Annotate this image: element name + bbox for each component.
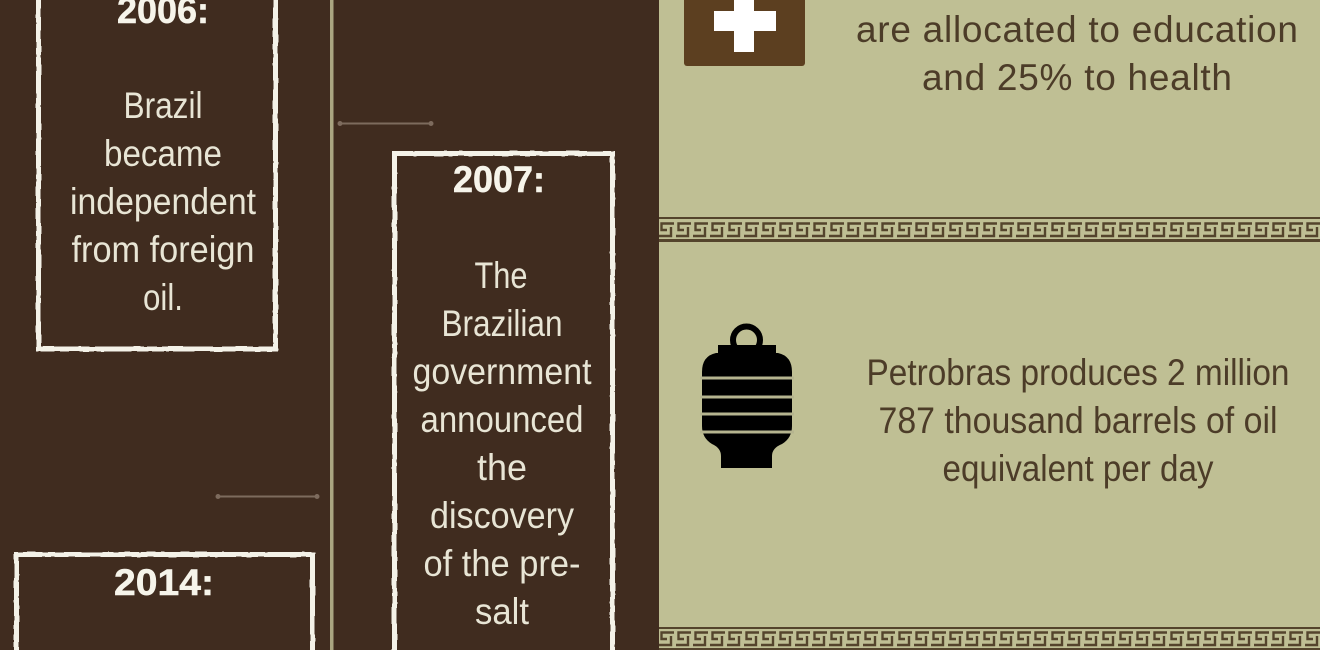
fact text: Petrobras production [866,352,1290,489]
fact text: education and health: are allocated to education [856,9,1298,50]
fact text: Petrobras production: equivalent per day [942,448,1214,489]
timeline card: 2006 [38,0,276,349]
card text: 2007: announced [420,399,584,440]
timeline vertical axis [330,0,334,650]
fact text: education and health: and 25% to health [922,57,1232,98]
card text: 2007 [412,255,592,632]
card text: 2007: salt [475,591,530,632]
panel: facts background [659,0,1320,650]
icon: health cross [684,0,805,66]
card text: 2007: The [474,255,528,296]
connector: 2014 [216,494,320,499]
icon: oil barrel lantern [700,326,794,468]
card text: 2006: Brazil [124,85,202,126]
card text: 2006: independent [70,181,257,222]
year: 2014: 2014: [114,562,214,603]
timeline card: 2014 [16,554,312,650]
card text: 2007: discovery [430,495,574,536]
timeline card: 2007 [394,154,612,650]
card text: 2007: the [477,447,527,488]
fact text: Petrobras production: 787 thousand barrels of oil [878,400,1278,441]
card text: 2006: oil. [143,277,183,318]
panel: timeline background [0,0,659,650]
card text: 2007: of the pre- [424,543,580,584]
card text: 2007: Brazilian [442,303,562,344]
year: 2007: 2007: [453,159,545,200]
connector: 2007 [338,121,434,126]
meander divider: lower [659,627,1320,650]
card text: 2007: government [412,351,592,392]
card text: 2006: became [104,133,222,174]
meander divider: upper [659,217,1320,242]
fact text: education and health [856,9,1298,98]
card text: 2006 [70,85,257,318]
card text: 2006: from foreign [72,229,254,270]
